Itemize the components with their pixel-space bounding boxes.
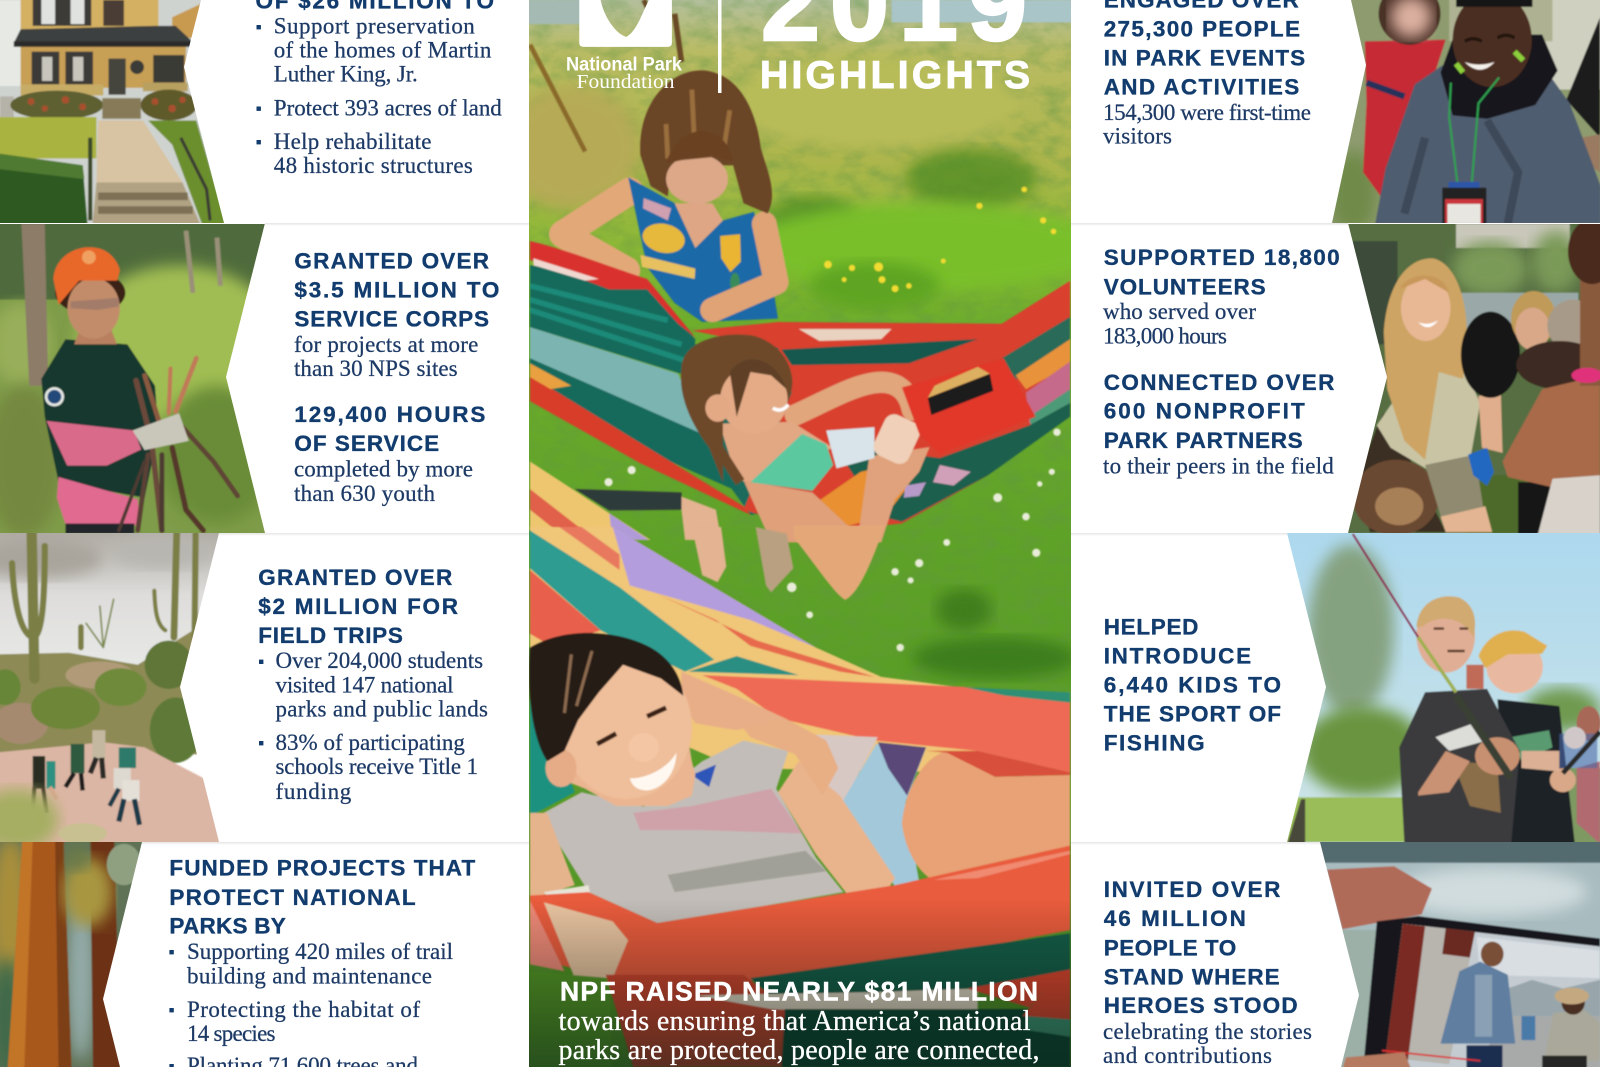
stat: helped introduce 6,440 kids [1104, 614, 1281, 756]
bullet list: Support preservation [274, 14, 475, 39]
bottom hand [544, 884, 590, 896]
panel: fishing [1071, 530, 1600, 844]
girl standing [563, 191, 630, 270]
pole [575, 489, 682, 510]
bullet list: Protecting the habitat of [187, 997, 420, 1022]
stat: 129,400 hours of service: OF SERVICE [294, 431, 439, 456]
woman 2 [1511, 291, 1556, 346]
heading: $2 MILLION FOR [258, 594, 458, 619]
shadow [219, 533, 529, 536]
stat: connected over 600 nonprofit park partners: 600 NONPROFIT [1104, 399, 1305, 424]
stat: granted over $3.5 million: for projects at more [294, 332, 478, 357]
stat: invited over 46 million people: STAND WHERE [1104, 964, 1280, 989]
stat: 129,400 hours of service [294, 402, 485, 506]
stat: supported 18,800 volunteers: SUPPORTED 18,800 [1104, 245, 1340, 270]
callout: NPF raised nearly $81 million: towards ensuring that America’s national [558, 1006, 1031, 1037]
heading [258, 565, 458, 648]
logo: National Park Foundation arrowhead: Foundation [576, 71, 674, 93]
body [41, 339, 158, 498]
stat: granted over $3.5 million: SERVICE CORPS [294, 306, 489, 331]
photo: children in hammocks [502, 0, 1105, 1067]
arms [778, 761, 895, 894]
stat: connected over 600 nonprofit park partners: CONNECTED OVER [1104, 370, 1334, 395]
bullet list: 83% of participating [276, 730, 465, 755]
panel: service corps grants [0, 220, 529, 537]
legs of girl [680, 496, 721, 540]
photo: giant sequoia trees [0, 837, 148, 1067]
fur and right person [1547, 300, 1599, 351]
shadow [142, 842, 529, 845]
woman 1 [1377, 351, 1480, 470]
bullet list: of the homes of Martin [274, 38, 492, 62]
chevron: white text panel [1071, 0, 1366, 223]
callout: NPF raised nearly $81 million [558, 976, 1040, 1066]
chevron: white text panel [226, 223, 529, 533]
white fabric behind arm [816, 734, 878, 801]
stat: supported 18,800 volunteers: who served over [1103, 299, 1256, 324]
bullet list: Luther King, Jr. [274, 62, 418, 87]
stat: connected over 600 nonprofit park partners: PARK PARTNERS [1104, 428, 1303, 453]
stat: engaged over 275,300 people: AND ACTIVITIES [1104, 74, 1299, 99]
chevron: white text panel [184, 0, 529, 223]
stat: engaged over 275,300 people: IN PARK EVENTS [1104, 45, 1305, 70]
stat: connected over 600 nonprofit park partners [1103, 370, 1334, 478]
logo: National Park Foundation arrowhead [566, 0, 682, 93]
face and hair [570, 747, 696, 807]
bullet list: schools receive Title 1 [276, 754, 478, 779]
callout: NPF raised nearly $81 million: NPF RAISED NEARLY $81 MILLION [560, 976, 1038, 1006]
coral fabric [702, 675, 1070, 772]
chevron: white text panel [1071, 533, 1326, 842]
hammock left stripes [530, 265, 695, 377]
stat: invited over 46 million people: INVITED OVER [1104, 877, 1280, 902]
head [54, 279, 126, 310]
panel: field trips [0, 530, 529, 851]
chevron: white text panel [1071, 223, 1387, 533]
panel: volunteers and partners [1071, 219, 1600, 536]
bottom area [530, 971, 613, 1067]
stat: engaged over 275,300 people: visitors [1103, 124, 1172, 149]
stat: granted over $3.5 million: $3.5 MILLION TO [294, 278, 499, 302]
bullet list: parks and public lands [276, 696, 488, 721]
chevron: white text panel [1071, 842, 1359, 1067]
stat: supported 18,800 volunteers [1103, 245, 1340, 349]
sticks [119, 358, 238, 530]
stat: 129,400 hours of service: completed by more [294, 457, 473, 482]
girl in hammock [795, 382, 912, 415]
clover dots [604, 428, 1061, 520]
leg [902, 751, 1070, 880]
panel: center hero photo with title [502, 0, 1105, 1067]
stat: invited over 46 million people: PEOPLE TO [1104, 935, 1236, 960]
top hammock [530, 527, 1070, 775]
bullet list: Protect 393 acres of land [274, 95, 502, 120]
title: 2019 highlights: HIGHLIGHTS [760, 54, 1030, 97]
rods [1353, 534, 1418, 637]
stat: helped introduce 6,440 kids: 6,440 KIDS TO [1104, 672, 1281, 697]
legs and arm at top [692, 527, 726, 582]
teal under child [530, 672, 575, 816]
red bag [902, 358, 1036, 435]
photo: kids fishing [1284, 530, 1600, 844]
stat: engaged over 275,300 people [1103, 0, 1311, 149]
stat: invited over 46 million people: celebrating the stories [1103, 1019, 1312, 1044]
heading: PROTECT NATIONAL [169, 885, 416, 910]
shadow [1071, 223, 1348, 226]
stat: engaged over 275,300 people: 275,300 PEOPLE [1104, 16, 1300, 42]
bullet list: Over 204,000 students [276, 648, 483, 673]
divider [718, 0, 722, 93]
heading: GRANTED OVER [258, 565, 452, 590]
stat: helped introduce 6,440 kids: HELPED [1104, 614, 1198, 639]
red fabric [530, 846, 1070, 988]
photo: ranger laughing with puppets [1346, 219, 1600, 536]
shadow [265, 223, 529, 226]
heading: FUNDED PROJECTS THAT [169, 856, 475, 880]
photo: phone showing ranger video [1315, 839, 1600, 1067]
bullet list: Supporting 420 miles of trail [187, 939, 453, 964]
logo: National Park Foundation arrowhead: National Park [566, 54, 682, 76]
photo: historic yellow house [0, 0, 238, 227]
shadow [1071, 533, 1287, 536]
bullet list [259, 648, 488, 804]
bullet list: 14 species [187, 1021, 276, 1046]
photo: hikers among saguaro cacti [0, 530, 224, 851]
bullet list: building and maintenance [187, 963, 432, 988]
stat: engaged over 275,300 people: 154,300 were first-time [1103, 100, 1311, 125]
stat: invited over 46 million people: HEROES STOOD [1104, 993, 1298, 1018]
stat: granted over $3.5 million: than 30 NPS sites [294, 356, 458, 381]
boy 2 [1497, 699, 1575, 844]
stat: supported 18,800 volunteers: VOLUNTEERS [1104, 274, 1266, 299]
shorts [840, 744, 926, 887]
shadow [1071, 842, 1320, 845]
stat: helped introduce 6,440 kids: FISHING [1104, 730, 1205, 756]
stat: helped introduce 6,440 kids: INTRODUCE [1104, 643, 1251, 668]
bullet list: visited 147 national [276, 672, 454, 697]
photo: smiling boy with lanyard [1329, 0, 1600, 234]
hammock right [692, 281, 1070, 532]
stat: invited over 46 million people: 46 MILLION [1104, 906, 1246, 931]
heading: FIELD TRIPS [258, 623, 403, 648]
panel: funded protection projects [0, 837, 529, 1067]
panel: stand where heroes stood [1071, 839, 1600, 1067]
stat: invited over 46 million people [1103, 877, 1312, 1067]
stat: granted over $3.5 million [294, 249, 499, 381]
shirt [540, 741, 843, 923]
bullet list: Help rehabilitate [274, 129, 432, 154]
stat: 129,400 hours of service: 129,400 HOURS [294, 402, 485, 427]
stat: supported 18,800 volunteers: 183,000 hours [1103, 324, 1227, 349]
chevron: white text panel [103, 842, 529, 1067]
lower hammock corner [530, 461, 651, 540]
stat: 129,400 hours of service: than 630 youth [294, 481, 436, 506]
heading: PARKS BY [169, 914, 286, 939]
hammock behind child [675, 344, 812, 515]
boy 1 [1399, 689, 1520, 844]
bullet list: 48 historic structures [274, 153, 473, 178]
stat: helped introduce 6,440 kids: THE SPORT OF [1104, 702, 1281, 727]
title: 2019 highlights [760, 0, 1030, 97]
panel: park events [1102, 0, 1600, 223]
stat: connected over 600 nonprofit park partners: to their peers in the field [1103, 454, 1334, 478]
callout: NPF raised nearly $81 million: parks are protected, people are connected, [558, 1035, 1040, 1066]
heading [169, 856, 475, 939]
bullet list: funding [276, 779, 352, 804]
bullet list [256, 14, 502, 178]
stat: granted over $3.5 million: GRANTED OVER [294, 249, 489, 274]
photo: service corps member with hard hat [0, 220, 282, 537]
chevron: white text panel [180, 533, 529, 842]
panel: preservation of Martin Luther King Jr. homes [0, 0, 529, 227]
bullet list [169, 939, 453, 1067]
